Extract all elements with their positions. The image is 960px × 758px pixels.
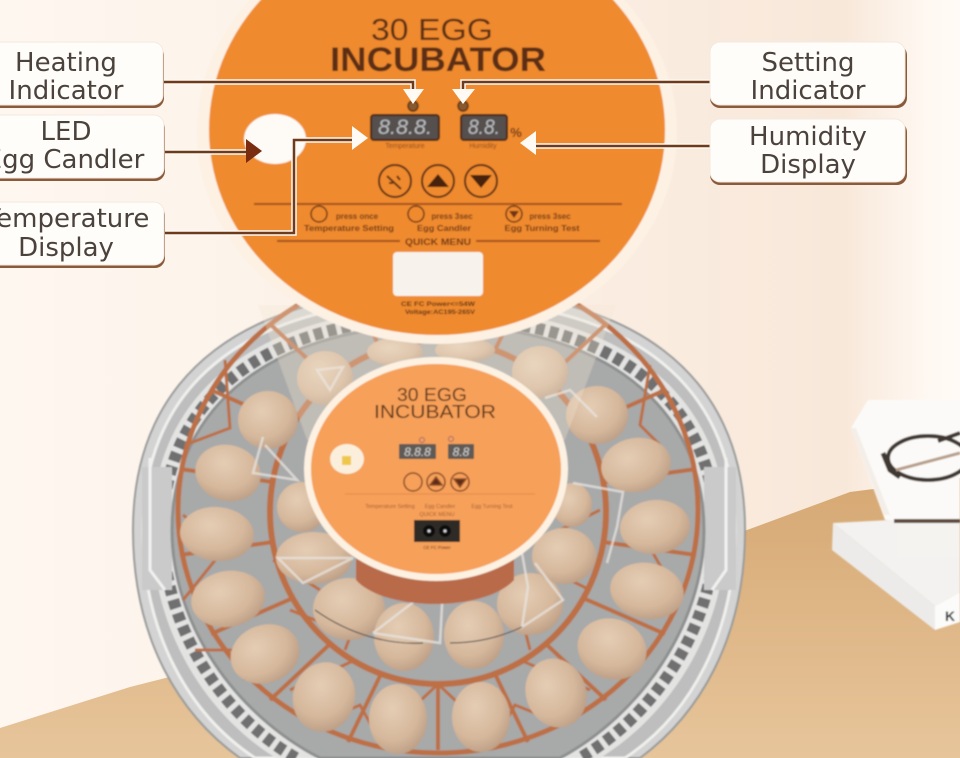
projection beam [258,305,616,440]
quick menu instructions [254,204,622,248]
small quick menu: Egg Turning Test [471,504,513,510]
small displays [399,436,474,459]
quick menu instructions: Temperature Setting [304,224,394,233]
label: humidity display [710,119,907,185]
temperature display [371,115,439,150]
arrow: heating indicator [160,82,424,104]
small control panel [304,357,568,581]
small displays: 8.8 [453,445,470,459]
small candler light [330,444,364,474]
quick menu instructions: press 3sec [431,212,473,221]
white socket cover [393,252,483,296]
LED egg candler window [244,114,306,164]
arrow: LED egg candler [160,139,262,163]
humidity display: % [510,125,522,140]
quick menu instructions: QUICK MENU [405,237,471,248]
certification text: Voltage:AC195-265V [405,309,476,316]
control buttons [379,165,497,197]
outer ring of eggs [178,338,692,754]
egg turner clips [253,367,623,643]
humidity display: Humidity [469,143,497,150]
books and glasses [832,400,960,630]
callout labels [0,42,907,268]
dome seam lines [315,610,522,643]
label: LED egg candler: LED [41,117,91,147]
small displays: 8.8.8 [404,445,431,459]
label: temperature display: Display [18,233,114,263]
small buttons [404,473,469,491]
quick menu instructions: press once [336,212,379,221]
small quick menu: Temperature Setting [365,504,415,510]
small quick menu [345,494,535,518]
label: setting indicator: Indicator [751,76,866,106]
enlarged control panel [197,0,677,344]
panel title: 30 EGG [371,12,493,47]
certification text [401,301,476,316]
arrow: setting indicator [452,82,712,104]
label: LED egg candler [0,115,165,181]
certification text: CE FC Power<=54W [401,301,476,308]
power socket [414,520,460,550]
orange egg tray [178,267,698,753]
arrow: temperature display [160,126,368,233]
power socket: CE FC Power [423,545,451,550]
lower book [832,520,960,630]
label: humidity display: Display [760,150,856,180]
temperature display: 8.8.8. [378,116,432,139]
panel title [330,12,546,79]
label: heating indicator: Indicator [9,76,124,106]
small panel title [374,385,496,422]
small panel title: 30 EGG [397,385,467,405]
small quick menu: QUICK MENU [419,512,455,518]
arrows and leader lines [160,82,712,233]
humidity display [461,115,522,150]
quick menu instructions: Egg Candler [417,224,471,233]
indicator lights [408,101,468,111]
inner ring of eggs [276,482,596,671]
quick menu instructions: press 3sec [529,212,571,221]
temperature display: Temperature [385,143,425,150]
quick menu instructions: Egg Turning Test [504,224,580,233]
label: heating indicator [0,42,164,108]
small quick menu: Egg Candler [425,504,455,510]
label: heating indicator: Heating [15,48,117,78]
wooden table [0,478,960,758]
small panel title: INCUBATOR [374,402,496,422]
incubator base rim [133,290,745,758]
arrow: humidity display [520,131,712,155]
glasses [883,433,960,480]
label: setting indicator [710,42,907,108]
label: temperature display [0,202,165,268]
label: setting indicator: Setting [761,48,855,78]
humidity display: 8.8. [468,116,500,139]
lower book: K [945,608,955,624]
panel title: INCUBATOR [330,41,546,79]
upper book [851,400,960,558]
scene: incubator [133,0,745,758]
center column [356,540,514,604]
label: humidity display: Humidity [749,122,867,152]
